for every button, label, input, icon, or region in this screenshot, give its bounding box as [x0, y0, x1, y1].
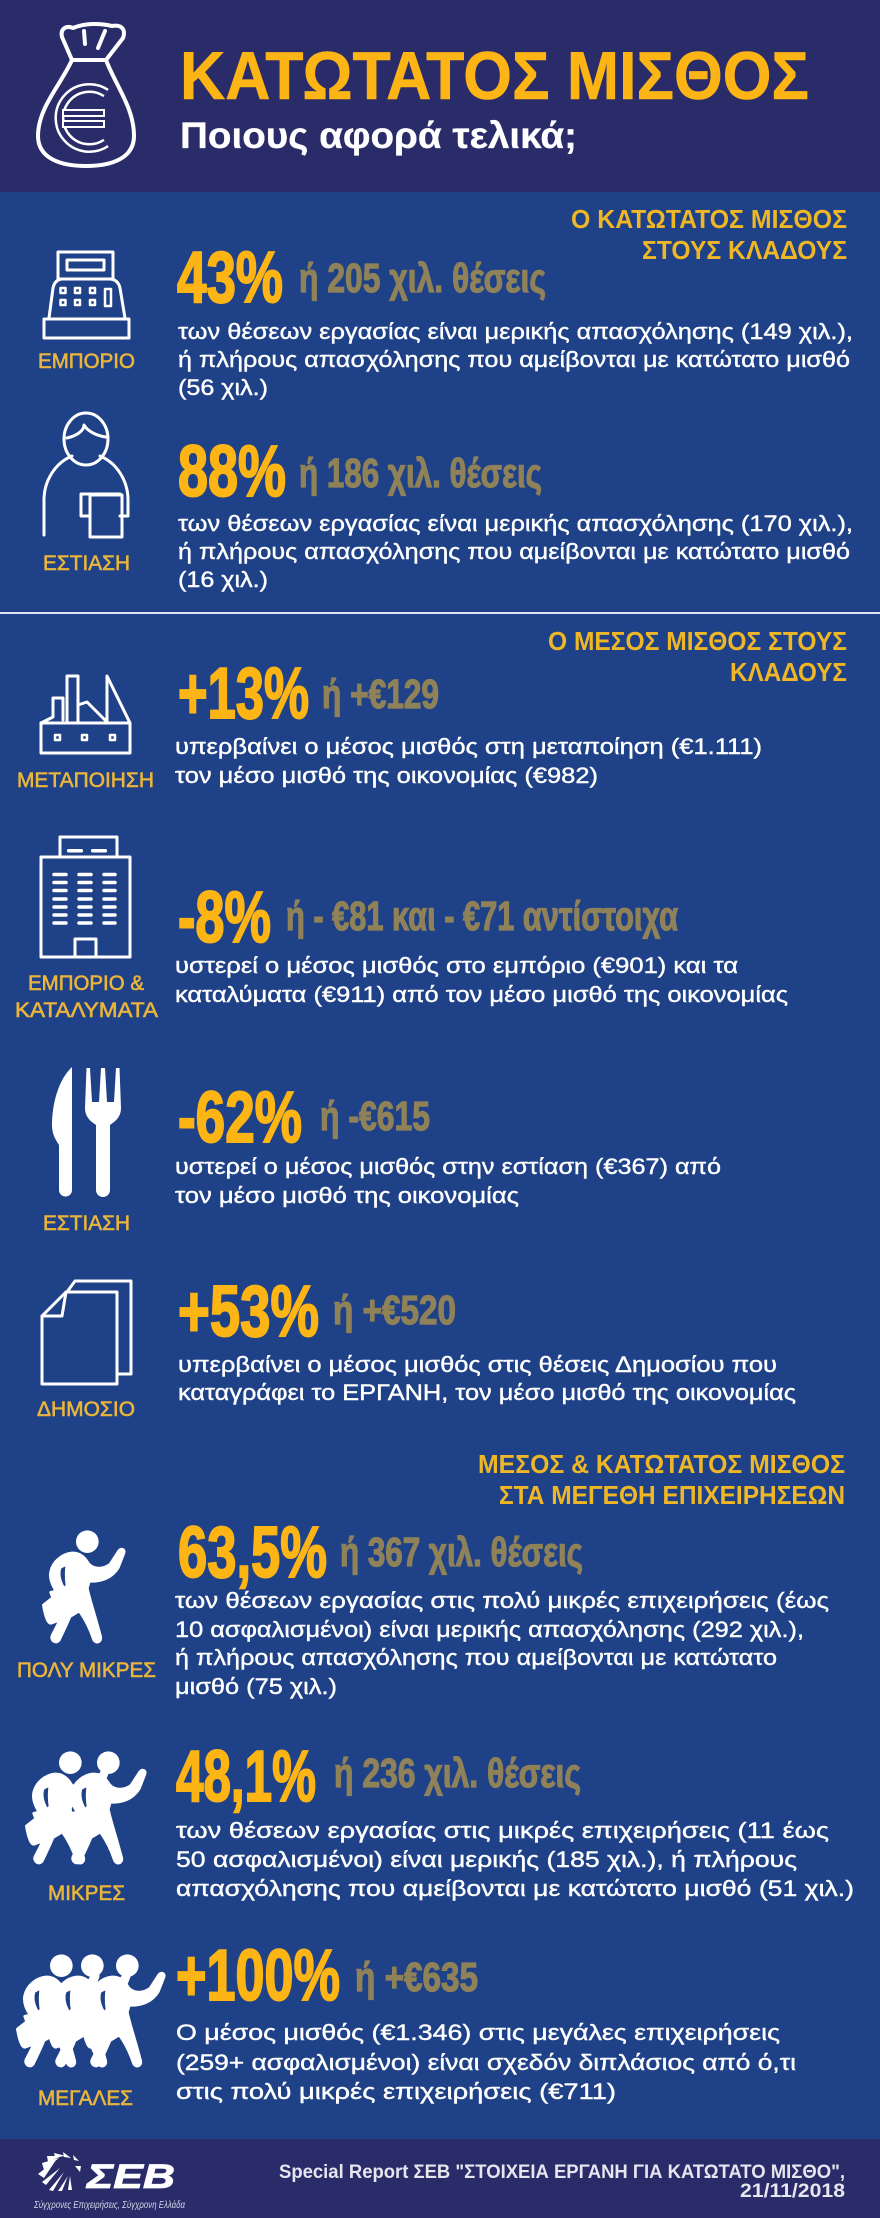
panel: food service average wage	[43, 1067, 721, 1235]
icon: cash register	[44, 252, 129, 338]
big number: 48,1%	[176, 1737, 316, 1817]
label: commerce and accommodation: ΕΜΠΟΡΙΟ &	[28, 972, 144, 995]
icon: knife and fork	[52, 1067, 121, 1197]
subtitle: Ποιους αφορά τελικά;	[180, 115, 577, 156]
description: 10 ασφαλισμένοι) είναι μερικής απασχόλησης (292 χιλ.),	[175, 1617, 804, 1642]
icon: three walking people	[17, 1954, 164, 2066]
secondary figure: ή 205 χιλ. θέσεις	[299, 255, 546, 301]
header band	[0, 0, 880, 192]
description: (259+ ασφαλισμένοι) είναι σχεδόν διπλάσιος από ό,τι	[176, 2050, 796, 2075]
label: commerce and accommodation: ΚΑΤΑΛΥΜΑΤΑ	[15, 999, 158, 1022]
description: (56 χιλ.)	[178, 375, 268, 400]
secondary figure: ή 236 χιλ. θέσεις	[334, 1750, 581, 1796]
description	[175, 734, 762, 788]
footer band	[0, 2139, 880, 2218]
icon: building	[41, 837, 130, 957]
description: στις πολύ μικρές επιχειρήσεις (€711)	[176, 2079, 616, 2104]
description	[178, 511, 853, 592]
title: ΚΑΤΩΤΑΤΟΣ ΜΙΣΘΟΣ	[180, 38, 809, 114]
secondary figure: ή 186 χιλ. θέσεις	[299, 450, 542, 496]
logo: SEV	[33, 2152, 186, 2211]
description	[178, 1352, 796, 1405]
section heading: average wage by sector	[548, 628, 847, 687]
icon: factory	[41, 676, 130, 753]
panel: small companies	[26, 1737, 854, 1905]
section heading: minimum wage by sector: ΣΤΟΥΣ ΚΛΑΔΟΥΣ	[642, 237, 847, 265]
description: τον μέσο μισθό της οικονομίας	[175, 1183, 519, 1208]
description	[175, 1588, 829, 1699]
label: public sector: ΔΗΜΟΣΙΟ	[37, 1398, 135, 1421]
big number: +13%	[178, 654, 309, 734]
description: 50 ασφαλισμένοι) είναι μερικής (185 χιλ.), ή πλήρους	[176, 1847, 797, 1872]
logo mark: radial swoosh	[38, 2152, 81, 2191]
secondary figure: ή 367 χιλ. θέσεις	[340, 1529, 583, 1575]
description: Ο μέσος μισθός (€1.346) στις μεγάλες επιχειρήσεις	[176, 2020, 780, 2045]
icon: documents	[42, 1281, 131, 1384]
panel: commerce	[38, 238, 853, 400]
panel: food service	[43, 413, 853, 592]
big number: +100%	[176, 1936, 340, 2016]
description: υπερβαίνει ο μέσος μισθός στη μεταποίηση (€1.111)	[175, 734, 762, 759]
big number: -8%	[178, 878, 271, 958]
big number: 43%	[177, 238, 283, 318]
panel: public sector	[37, 1272, 796, 1421]
label: food service: ΕΣΤΙΑΣΗ	[43, 1212, 130, 1235]
source note	[279, 2162, 845, 2202]
big number: +53%	[178, 1272, 319, 1352]
label: large: ΜΕΓΑΛΕΣ	[38, 2087, 133, 2110]
big number: -62%	[178, 1078, 302, 1158]
description	[176, 1818, 854, 1901]
secondary figure: ή - €81 και - €71 αντίστοιχα	[286, 893, 678, 939]
secondary figure: ή +€129	[322, 671, 439, 717]
description: των θέσεων εργασίας στις πολύ μικρές επιχειρήσεις (έως	[175, 1588, 829, 1613]
description: ή πλήρους απασχόλησης που αμείβονται με κατώτατο μισθό	[178, 347, 850, 372]
label: commerce: ΕΜΠΟΡΙΟ	[38, 350, 135, 373]
description: των θέσεων εργασίας είναι μερικής απασχόλησης (170 χιλ.),	[178, 511, 853, 536]
section heading: wages by company size	[478, 1451, 845, 1510]
panel: very small companies	[17, 1513, 829, 1699]
label: small: ΜΙΚΡΕΣ	[48, 1882, 125, 1905]
secondary figure: ή +€635	[355, 1954, 478, 2000]
description: μισθό (75 χιλ.)	[175, 1674, 337, 1699]
description: απασχόλησης που αμείβονται με κατώτατο μισθό (51 χιλ.)	[176, 1876, 854, 1901]
source note: 21/11/2018	[740, 2181, 845, 2202]
big number: 88%	[178, 432, 286, 512]
description: ή πλήρους απασχόλησης που αμείβονται με κατώτατο μισθό	[178, 539, 850, 564]
description: καταγράφει το ΕΡΓΑΝΗ, τον μέσο μισθό της οικονομίας	[178, 1380, 796, 1405]
icon: money bag with euro	[38, 24, 134, 166]
description: καταλύματα (€911) από τον μέσο μισθό της οικονομίας	[175, 982, 788, 1007]
description: τον μέσο μισθό της οικονομίας (€982)	[175, 763, 598, 788]
section heading: wages by company size: ΣΤΑ ΜΕΓΕΘΗ ΕΠΙΧΕΙΡΗΣΕΩΝ	[499, 1482, 845, 1510]
description	[175, 953, 788, 1007]
section heading: average wage by sector: Ο ΜΕΣΟΣ ΜΙΣΘΟΣ ΣΤΟΥΣ	[548, 628, 847, 656]
description: των θέσεων εργασίας είναι μερικής απασχόλησης (149 χιλ.),	[178, 319, 853, 344]
section heading: minimum wage by sector	[571, 206, 847, 265]
label: food service: ΕΣΤΙΑΣΗ	[43, 552, 130, 575]
logo tagline: Σύγχρονες Επιχειρήσεις, Σύγχρονη Ελλάδα	[33, 2199, 186, 2211]
section heading: average wage by sector: ΚΛΑΔΟΥΣ	[730, 659, 847, 687]
description: υπερβαίνει ο μέσος μισθός στις θέσεις Δημοσίου που	[178, 1352, 777, 1377]
description	[176, 2020, 796, 2104]
label: manufacturing: ΜΕΤΑΠΟΙΗΣΗ	[17, 769, 154, 792]
icon: one walking person	[43, 1530, 124, 1642]
label: very small: ΠΟΛΥ ΜΙΚΡΕΣ	[17, 1659, 156, 1682]
description: υστερεί ο μέσος μισθός στο εμπόριο (€901) και τα	[175, 953, 738, 978]
big number: 63,5%	[178, 1513, 327, 1593]
description: ή πλήρους απασχόλησης που αμείβονται με κατώτατο	[175, 1645, 777, 1670]
source note: Special Report ΣΕΒ "ΣΤΟΙΧΕΙΑ ΕΡΓΑΝΗ ΓΙΑ ΚΑΤΩΤΑΤΟ ΜΙΣΘΟ",	[279, 2162, 845, 2183]
label: commerce and accommodation	[15, 972, 158, 1022]
description	[175, 1154, 721, 1208]
panel: large companies	[17, 1936, 796, 2110]
secondary figure: ή -€615	[320, 1093, 430, 1139]
logo wordmark: ΣΕΒ	[86, 2158, 175, 2196]
panel: commerce and accommodation	[15, 837, 788, 1022]
description: (16 χιλ.)	[178, 567, 268, 592]
secondary figure: ή +€520	[333, 1287, 456, 1333]
section heading: minimum wage by sector: Ο ΚΑΤΩΤΑΤΟΣ ΜΙΣΘΟΣ	[571, 206, 847, 234]
description	[178, 319, 853, 400]
panel: manufacturing	[17, 654, 762, 792]
description: υστερεί ο μέσος μισθός στην εστίαση (€367) από	[175, 1154, 721, 1179]
description: των θέσεων εργασίας στις μικρές επιχειρήσεις (11 έως	[176, 1818, 829, 1843]
section heading: wages by company size: ΜΕΣΟΣ & ΚΑΤΩΤΑΤΟΣ ΜΙΣΘΟΣ	[478, 1451, 845, 1479]
icon: two walking people	[26, 1751, 145, 1863]
icon: waiter	[44, 413, 128, 537]
